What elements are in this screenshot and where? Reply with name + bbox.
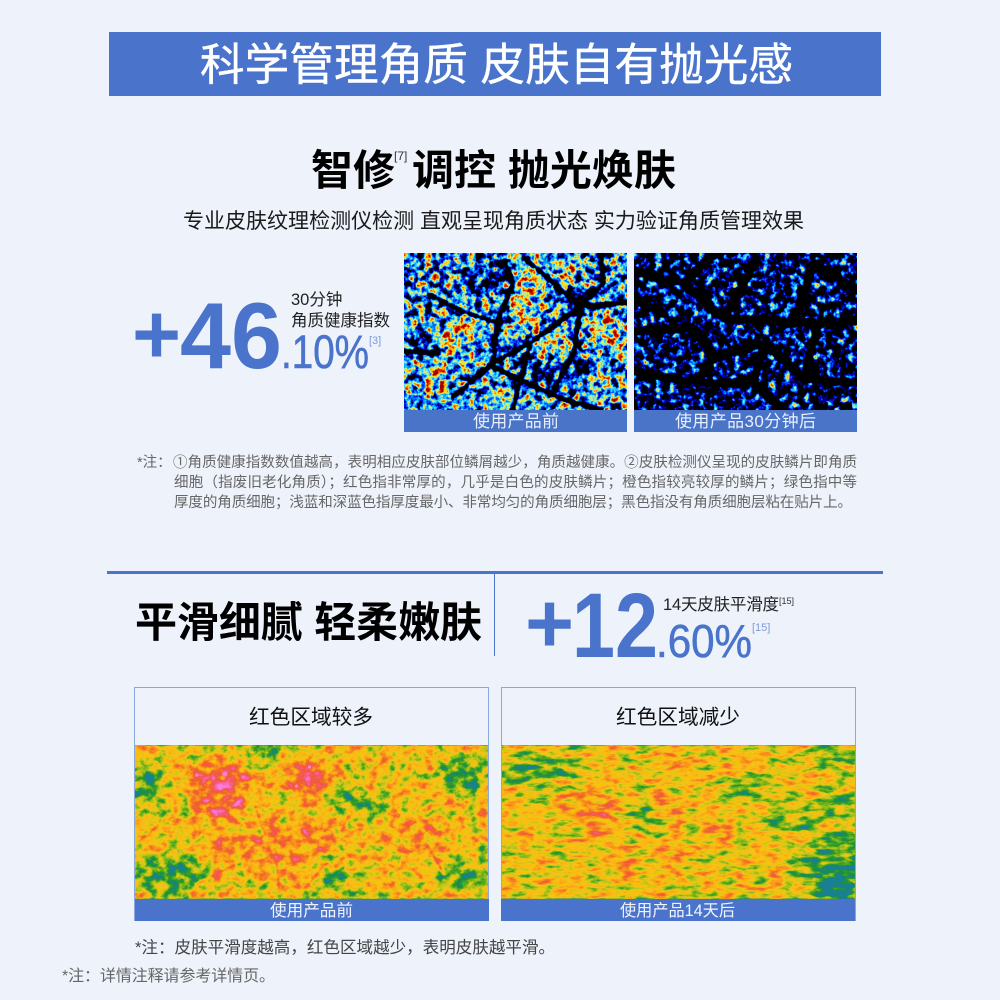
footnote: smoothness: *注：皮肤平滑度越高，红色区域越少，表明皮肤越平滑。	[135, 938, 555, 957]
stat: +12.60%	[525, 575, 794, 677]
title banner	[109, 32, 881, 96]
heading: polish skin: [7]	[394, 149, 407, 163]
footnote: see details: *注：详情注释请参考详情页。	[62, 967, 275, 985]
image panel: skin scan before use: 使用产品前	[473, 411, 559, 431]
panel: before use, more red: 红色区域较多	[249, 706, 373, 729]
footnote: keratin health index: 厚度的角质细胞；浅蓝和深蓝色指厚度最小、非常均匀的角质细胞层；黑色指没有角质细胞层粘在贴片上。	[174, 494, 852, 511]
stat: +12.60%: [15]	[752, 622, 770, 634]
image panel: skin scan 30 minutes after use	[634, 253, 857, 432]
panel: after 14 days, less red: 红色区域减少	[616, 706, 740, 729]
heading: smooth skin: 平滑细腻 轻柔嫩肤	[135, 599, 482, 646]
heading: polish skin: 调控 抛光焕肤	[412, 147, 676, 194]
stat: +46.10%: .10%	[281, 325, 369, 378]
stat: +12.60%: [15]	[779, 596, 794, 606]
panel: before use, more red	[131, 688, 489, 921]
footnote: keratin health index: 细胞（指废旧老化角质）；红色指非常厚的，几乎是白色的皮肤鳞片；橙色指较亮较厚的鳞片；绿色指中等	[174, 473, 857, 491]
footnote: keratin health index: *注：	[137, 454, 172, 471]
stat: +46.10%: 角质健康指数	[291, 311, 390, 330]
image panel: skin scan before use	[404, 253, 628, 432]
stat: +12.60%: .60%	[656, 615, 752, 667]
panel: before use, more red: 使用产品前	[270, 901, 353, 920]
stat: +12.60%: 12	[572, 575, 658, 677]
stat: +12.60%: +	[525, 576, 574, 670]
stat: +46.10%: +	[132, 287, 181, 381]
footnote: keratin health index	[137, 453, 857, 511]
stat: +46.10%	[132, 283, 390, 388]
title banner: 科学管理角质 皮肤自有抛光感	[200, 41, 793, 90]
stat: +46.10%: 46	[180, 283, 282, 388]
panel: after 14 days, less red	[492, 688, 872, 921]
footnote: keratin health index: ①角质健康指数数值越高，表明相应皮肤部位鳞屑越少，角质越健康。②皮肤检测仪呈现的皮肤鳞片即角质	[173, 453, 857, 471]
heading: polish skin: 智修	[311, 147, 395, 194]
stat: +46.10%: 30分钟	[291, 290, 342, 309]
subheading: 专业皮肤纹理检测仪检测 直观呈现角质状态 实力验证角质管理效果	[183, 210, 804, 233]
stat: +12.60%: 14天皮肤平滑度	[663, 595, 779, 614]
stat: +46.10%: [3]	[369, 335, 381, 347]
panel: after 14 days, less red: 使用产品14天后	[620, 902, 735, 920]
image panel: skin scan 30 minutes after use: 使用产品30分钟后	[675, 411, 816, 431]
